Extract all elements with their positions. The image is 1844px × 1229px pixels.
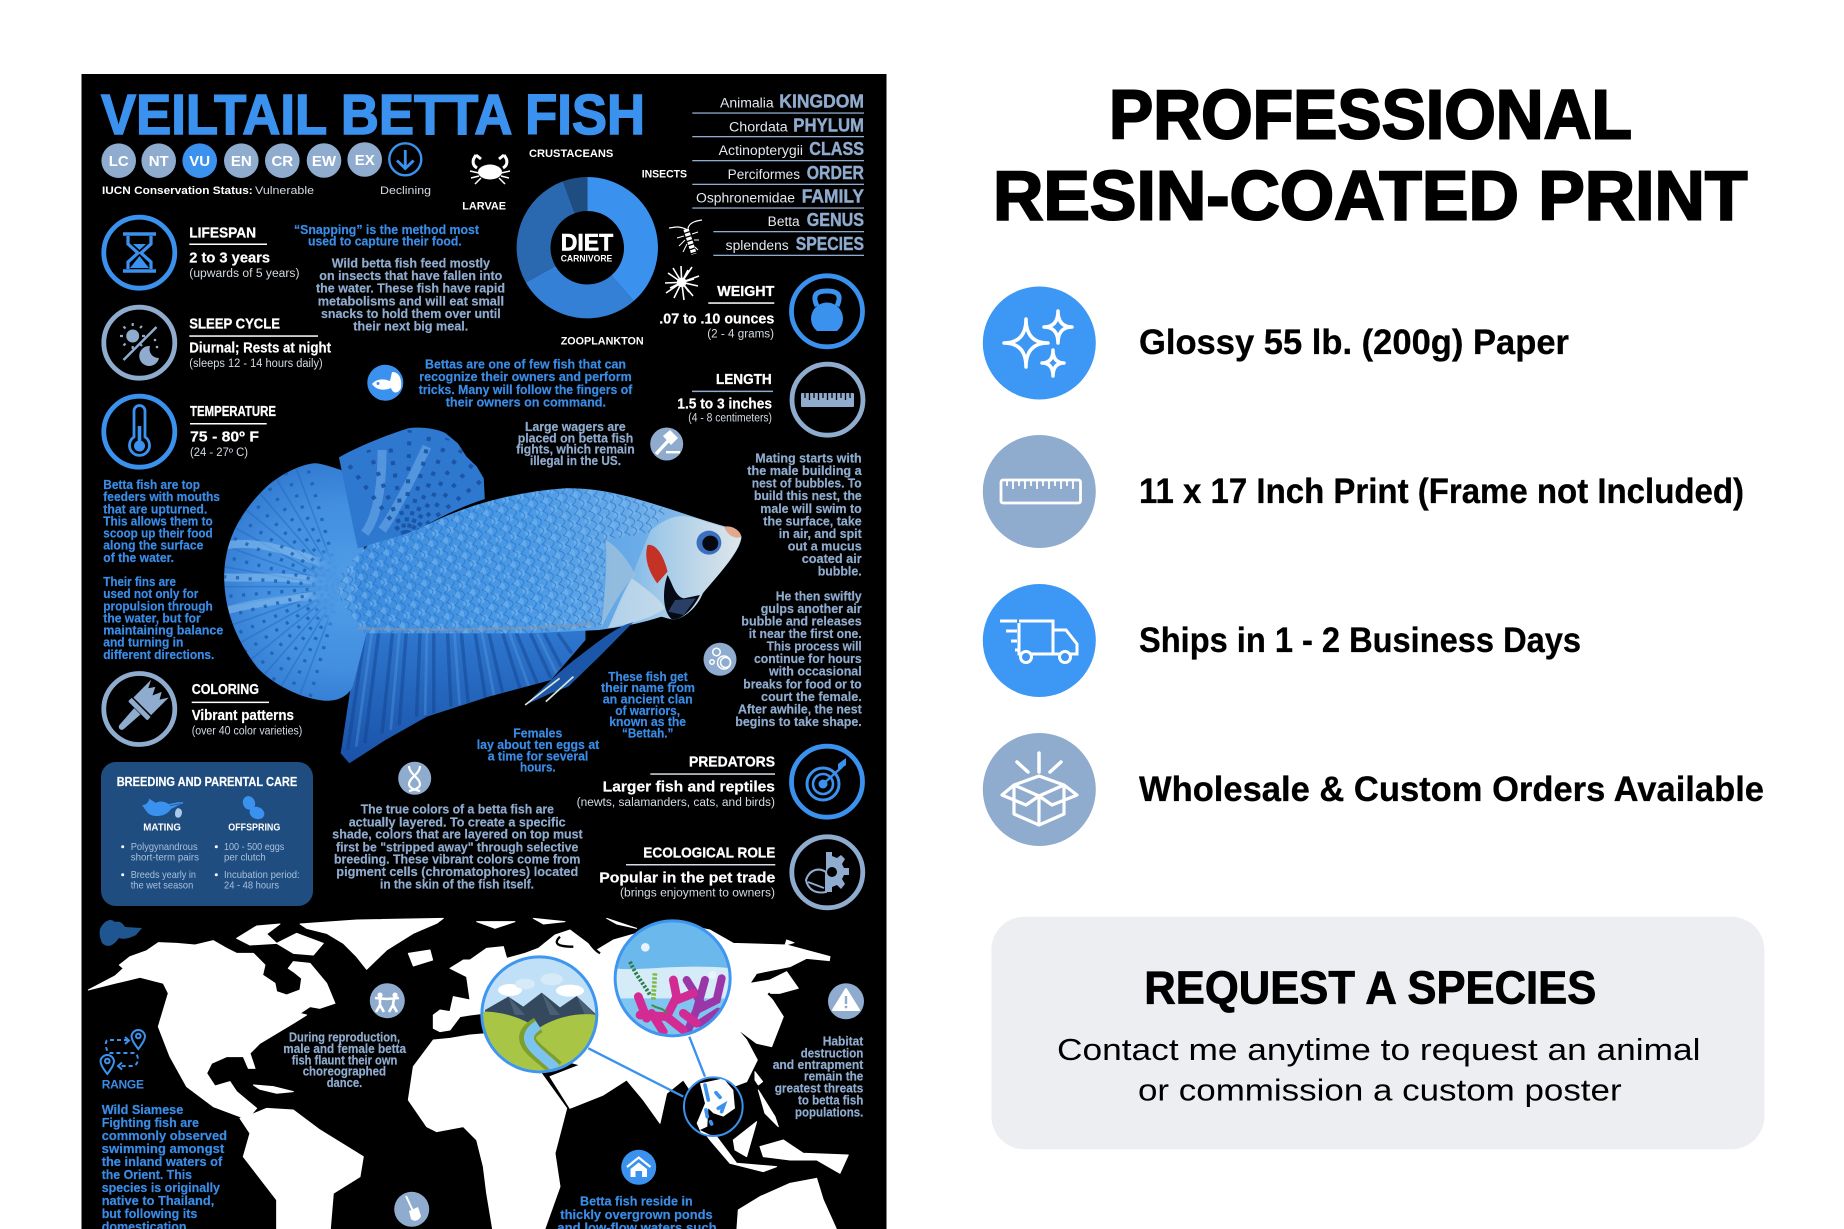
icon: sparkles paper xyxy=(983,286,1096,400)
text: bubble process: with occasional xyxy=(768,664,862,679)
panel: breeding and parental care xyxy=(101,762,313,906)
text: habitat threats: to betta fish xyxy=(798,1093,863,1108)
text: snapping: “Snapping” is the method most xyxy=(294,222,480,237)
icon: stork xyxy=(142,798,183,818)
icon: delivery truck xyxy=(983,584,1096,697)
text: mating starts: nest of bubbles. To xyxy=(752,476,862,491)
conservation status scale: EW xyxy=(312,153,337,170)
offspring column: 24 - 48 hours xyxy=(224,879,279,891)
text: betta habitat: Betta fish reside in xyxy=(580,1194,693,1209)
text: bettah name: of warriors, xyxy=(615,703,680,718)
coloring text: (over 40 color varieties) xyxy=(192,725,302,737)
length text: 1.5 to 3 inches xyxy=(677,396,772,412)
mating column: Breeds yearly in xyxy=(131,869,196,881)
length text xyxy=(677,371,773,424)
text: fins: Their fins are xyxy=(103,574,176,589)
connector lines xyxy=(588,1037,705,1097)
text: top feeders xyxy=(103,477,220,565)
text: true colors: in the skin of the fish itself. xyxy=(380,877,534,892)
text: bubble process: begins to take shape. xyxy=(735,714,862,729)
coloring text: Vibrant patterns xyxy=(192,708,294,724)
icon: ruler length xyxy=(792,364,863,435)
predators text xyxy=(577,754,775,809)
mating column xyxy=(121,821,199,891)
text: wild betta feeding xyxy=(316,255,505,334)
text: mating starts: bubble. xyxy=(818,563,862,578)
text: females xyxy=(477,726,600,775)
taxonomy list: SPECIES xyxy=(796,233,864,254)
dorsal fin xyxy=(339,428,485,548)
poster background xyxy=(82,74,886,1229)
icon: small betta silhouette xyxy=(100,920,142,946)
icon: thermometer temperature xyxy=(104,396,175,467)
feature text: wholesale: Wholesale & Custom Orders Available xyxy=(1139,770,1764,809)
text: fins: propulsion through xyxy=(103,598,213,613)
icon: open box xyxy=(983,733,1096,846)
text: wagers: fights, which remain xyxy=(516,442,635,457)
text: tricks: Bettas are one of few fish that can xyxy=(425,356,626,371)
scene: underwater coral xyxy=(613,919,733,1040)
predators text: (newts, salamanders, cats, and birds) xyxy=(577,797,775,809)
text: mating starts: Mating starts with xyxy=(755,450,862,465)
ecological role text: (brings enjoyment to owners) xyxy=(620,888,775,900)
range zoom circle xyxy=(684,1077,743,1138)
text: bubble process: it near the first one. xyxy=(749,626,862,641)
text: mating starts: coated air xyxy=(802,551,862,566)
scene: river valley xyxy=(480,955,600,1077)
text: bettah name: an ancient clan xyxy=(603,692,693,706)
icon: gavel xyxy=(650,428,683,460)
text: reproduction dance xyxy=(283,1030,407,1090)
gill and mouth xyxy=(608,545,700,628)
icon: sun and moon sleep cycle xyxy=(104,307,175,378)
lifespan text: (upwards of 5 years) xyxy=(189,268,300,280)
lifespan text: LIFESPAN xyxy=(189,224,256,241)
text: wild siamese: the Orient. This xyxy=(102,1167,192,1182)
sleep cycle text: (sleeps 12 - 14 hours daily) xyxy=(189,358,323,370)
text: reproduction dance: choreographed xyxy=(303,1064,386,1079)
predators text: Larger fish and reptiles xyxy=(603,780,775,796)
text: wild siamese: native to Thailand, xyxy=(102,1193,214,1208)
diet labels: INSECTS xyxy=(642,168,687,180)
mating column: the wet season xyxy=(131,879,193,891)
text: wild siamese: but following its xyxy=(102,1206,197,1221)
text: fins: and turning in xyxy=(103,635,183,650)
text: bubble process: breaks for food or to xyxy=(743,676,862,691)
text: wild siamese: Wild Siamese xyxy=(102,1102,183,1117)
feature text: shipping: Ships in 1 - 2 Business Days xyxy=(1139,621,1581,660)
offspring column: 100 - 500 eggs xyxy=(224,841,284,853)
world map: eurasia africa australia xyxy=(408,918,848,1229)
poster title: VEILTAIL BETTA FISH xyxy=(101,83,645,146)
betta fish photo illustration xyxy=(196,428,741,763)
text: true colors: shade, colors that are layered on top must xyxy=(332,827,583,842)
text: habitat threats: Habitat xyxy=(823,1034,864,1049)
sleep cycle text: SLEEP CYCLE xyxy=(189,316,280,333)
request a species card: or commission a custom poster xyxy=(1138,1073,1622,1108)
chart: diet donut: DIET xyxy=(561,230,613,257)
taxonomy list xyxy=(692,91,865,256)
predators text: PREDATORS xyxy=(689,754,775,771)
sleep cycle text xyxy=(189,316,331,370)
icon: house xyxy=(621,1150,656,1185)
ecological role text xyxy=(599,844,775,900)
text: tricks: their owners on command. xyxy=(446,394,606,409)
text: top feeders: of the water. xyxy=(103,550,174,565)
text: bettah name: These fish get xyxy=(608,669,688,684)
text: betta habitat: thickly overgrown ponds xyxy=(560,1207,713,1222)
text: mating starts: build this nest, the xyxy=(754,488,862,503)
length text: (4 - 8 centimeters) xyxy=(688,412,772,424)
text: snapping xyxy=(294,222,480,249)
text: true colors: The true colors of a betta fish are xyxy=(361,802,554,817)
offspring column: Incubation period: xyxy=(224,869,300,881)
taxonomy list: Osphronemidae xyxy=(696,191,795,206)
text: tricks: recognize their owners and perform xyxy=(419,369,632,384)
text: snapping: used to capture their food. xyxy=(308,234,462,249)
conservation status scale: CR xyxy=(271,153,293,170)
chart: diet donut: CARNIVORE xyxy=(561,254,612,265)
text: reproduction dance: male and female betta xyxy=(283,1041,407,1056)
text: top feeders: along the surface xyxy=(103,538,203,553)
iceland xyxy=(408,950,433,966)
text: true colors: pigment cells (chromatophores) located xyxy=(336,864,578,879)
conservation status label: Declining xyxy=(380,185,431,197)
product heading: PROFESSIONAL xyxy=(1109,75,1632,153)
text: wild betta feeding: the water. These fish have rapid xyxy=(316,281,505,296)
text: bubble process: He then swiftly xyxy=(776,588,862,603)
conservation status scale: VU xyxy=(189,153,210,170)
taxonomy list: Actinopterygii xyxy=(719,143,803,158)
lifespan text xyxy=(189,224,300,280)
text: true colors: actually layered. To create a specific xyxy=(349,814,566,829)
taxonomy list: Betta xyxy=(768,214,800,229)
text: habitat threats: remain the xyxy=(804,1069,863,1084)
world map: americas xyxy=(88,918,443,1229)
taxonomy list: Animalia xyxy=(720,96,774,111)
icon: paintbrush coloring xyxy=(104,674,175,744)
taxonomy list: KINGDOM xyxy=(779,91,864,112)
text: wagers xyxy=(516,419,635,468)
text: females: hours. xyxy=(520,760,556,775)
text: wild siamese xyxy=(102,1102,227,1229)
conservation status label: Vulnerable xyxy=(255,185,314,197)
temperature text: TEMPERATURE xyxy=(190,403,276,420)
diet labels xyxy=(462,148,687,347)
conservation status scale: NT xyxy=(149,153,169,170)
weight text: WEIGHT xyxy=(717,283,774,300)
text: bubble process: continue for hours xyxy=(754,651,862,666)
text: bubble process xyxy=(735,588,862,729)
text: habitat threats xyxy=(773,1034,864,1119)
taxonomy list: FAMILY xyxy=(802,186,865,207)
text: tricks: tricks. Many will follow the fingers of xyxy=(419,382,633,397)
text: wild siamese: the inland waters of xyxy=(102,1154,223,1169)
icon: target predators xyxy=(792,746,862,817)
text: fins: the water, but for xyxy=(103,610,201,625)
text: bettah name: their name from xyxy=(601,680,695,695)
conservation status label xyxy=(102,185,431,197)
lifespan text: 2 to 3 years xyxy=(189,251,270,267)
text: bubble process: bubble and releases xyxy=(741,613,862,628)
text: true colors xyxy=(332,802,583,892)
text: wild siamese: Fighting fish are xyxy=(102,1115,199,1130)
conservation status scale: EN xyxy=(231,153,252,170)
text: mating starts: out a mucus xyxy=(788,538,862,553)
icon: insect larva xyxy=(669,220,702,254)
text: top feeders: scoop up their food xyxy=(103,526,213,541)
chart: diet donut xyxy=(517,177,658,318)
icon: hourglass lifespan xyxy=(104,217,175,288)
temperature text: 75 - 80º F xyxy=(190,430,259,446)
text: bubble process: This process will xyxy=(767,639,862,654)
text: top feeders: Betta fish are top xyxy=(103,477,200,492)
mating column: Polygynandrous xyxy=(131,841,198,853)
offspring column: per clutch xyxy=(224,851,266,863)
length text: LENGTH xyxy=(716,371,772,388)
text: wild betta feeding: their next big meal. xyxy=(353,319,468,334)
text: habitat threats: and entrapment xyxy=(773,1057,864,1072)
icon: shovel xyxy=(394,1192,429,1227)
text: wagers: Large wagers are xyxy=(525,419,626,434)
text: habitat threats: greatest threats xyxy=(775,1081,863,1096)
taxonomy list: GENUS xyxy=(807,209,864,230)
text: top feeders: This allows them to xyxy=(103,514,213,528)
text: wild betta feeding: snacks to hold them over until xyxy=(321,306,501,321)
text: mating starts: the surface, take xyxy=(763,513,862,528)
icon: bubbles xyxy=(704,643,736,676)
eye xyxy=(697,526,741,555)
coloring text xyxy=(192,681,302,737)
text: bettah name xyxy=(601,669,695,740)
conservation status scale xyxy=(101,142,421,178)
fish body xyxy=(337,488,741,633)
sleep cycle text: Diurnal; Rests at night xyxy=(189,341,331,357)
text: mating starts: the male building a xyxy=(747,463,862,478)
icon: range route xyxy=(100,1030,145,1074)
icon: dancing couple xyxy=(370,983,405,1018)
text: mating starts xyxy=(747,450,862,578)
text: bubble process: court the female. xyxy=(761,689,862,704)
text: wild siamese: species is originally xyxy=(102,1180,221,1195)
taxonomy list: Chordata xyxy=(729,119,788,134)
text: bettah name: “Bettah.” xyxy=(622,726,673,740)
panel title: BREEDING AND PARENTAL CARE xyxy=(117,775,297,789)
taxonomy list: splendens xyxy=(726,238,789,253)
range heading: RANGE xyxy=(102,1077,144,1091)
text: wagers: illegal in the US. xyxy=(530,453,621,468)
icon: gear and leaf ecological role xyxy=(792,837,863,908)
request a species card: REQUEST A SPECIES xyxy=(1144,961,1596,1013)
text: females: a time for several xyxy=(488,748,588,763)
text: top feeders: feeders with mouths xyxy=(103,489,220,504)
weight text xyxy=(659,283,774,341)
temperature text: (24 - 27º C) xyxy=(190,447,248,459)
coloring text: COLORING xyxy=(192,681,259,698)
text: top feeders: that are upturned. xyxy=(103,501,207,516)
feature text: paper: Glossy 55 lb. (200g) Paper xyxy=(1139,323,1569,362)
text: betta habitat xyxy=(557,1194,717,1229)
diet labels: CRUSTACEANS xyxy=(529,148,613,160)
icon: ruler size xyxy=(983,435,1096,548)
text: true colors: breeding. These vibrant colors come from xyxy=(334,852,580,867)
icon: eggs xyxy=(241,794,266,821)
text: females: Females xyxy=(513,726,562,741)
weight text: .07 to .10 ounces xyxy=(659,311,774,327)
habitat zoom callouts xyxy=(480,919,743,1138)
text: wild betta feeding: on insects that have fallen into xyxy=(319,268,502,283)
text: reproduction dance: fish flaunt their own xyxy=(292,1052,397,1067)
conservation status scale: LC xyxy=(109,153,129,170)
text: females: lay about ten eggs at xyxy=(477,737,600,752)
anal fin xyxy=(341,627,585,763)
text: fins xyxy=(103,574,223,662)
ecological role text: ECOLOGICAL ROLE xyxy=(643,844,775,861)
text: fins: maintaining balance xyxy=(103,622,223,638)
diet labels: LARVAE xyxy=(462,201,506,213)
offspring column xyxy=(215,821,300,891)
temperature text xyxy=(190,403,276,459)
taxonomy list: Perciformes xyxy=(728,167,800,182)
text: wild siamese: swimming amongst xyxy=(102,1141,225,1156)
text: tricks xyxy=(419,356,633,409)
text: true colors: first be "stripped away" through selective xyxy=(336,839,578,854)
text: mating starts: in air, and spit xyxy=(779,526,862,541)
mating column: short-term pairs xyxy=(131,851,199,863)
text: wild betta feeding: metabolisms and will eat small xyxy=(318,293,504,308)
product heading: RESIN-COATED PRINT xyxy=(993,156,1748,234)
diet labels: ZOOPLANKTON xyxy=(561,335,644,347)
request a species card xyxy=(991,917,1764,1149)
greenland xyxy=(300,918,443,969)
icon: dna xyxy=(398,762,431,795)
text: reproduction dance: dance. xyxy=(327,1075,362,1090)
text: bubble process: gulps another air xyxy=(761,601,862,616)
feature text: size: 11 x 17 Inch Print (Frame not Included) xyxy=(1139,472,1744,511)
ventral fin xyxy=(525,622,634,705)
icon: warning xyxy=(828,983,864,1019)
icon: small fish xyxy=(367,365,403,401)
text: wagers: placed on betta fish xyxy=(518,430,633,445)
conservation status label: IUCN Conservation Status: xyxy=(102,185,253,197)
text: fins: different directions. xyxy=(103,647,214,662)
text: habitat threats: populations. xyxy=(795,1104,863,1119)
text: bettah name: known as the xyxy=(609,714,686,729)
text: fins: used not only for xyxy=(103,586,198,601)
text: wild siamese: commonly observed xyxy=(102,1128,227,1143)
tail fin xyxy=(224,463,368,701)
pectoral fin xyxy=(601,540,635,628)
request a species card: Contact me anytime to request an animal xyxy=(1057,1032,1700,1067)
icon: crab xyxy=(470,155,510,184)
product heading xyxy=(993,75,1748,234)
conservation status scale: EX xyxy=(355,152,375,169)
ecological role text: Popular in the pet trade xyxy=(599,871,775,887)
taxonomy list: CLASS xyxy=(809,138,864,159)
weight text: (2 - 4 grams) xyxy=(707,329,774,341)
text: habitat threats: destruction xyxy=(801,1045,863,1060)
icon: kettlebell weight xyxy=(792,276,862,347)
taxonomy list: ORDER xyxy=(807,162,864,183)
offspring column: OFFSPRING xyxy=(228,821,280,833)
mating column: MATING xyxy=(143,821,181,833)
text: reproduction dance: During reproduction, xyxy=(289,1030,400,1045)
taxonomy list: PHYLUM xyxy=(793,114,864,135)
text: mating starts: male will swim to xyxy=(760,501,862,516)
text: wild betta feeding: Wild betta fish feed mostly xyxy=(332,255,491,270)
icon: zooplankton starburst xyxy=(665,266,699,300)
text: bubble process: After awhile, the nest xyxy=(738,701,862,716)
